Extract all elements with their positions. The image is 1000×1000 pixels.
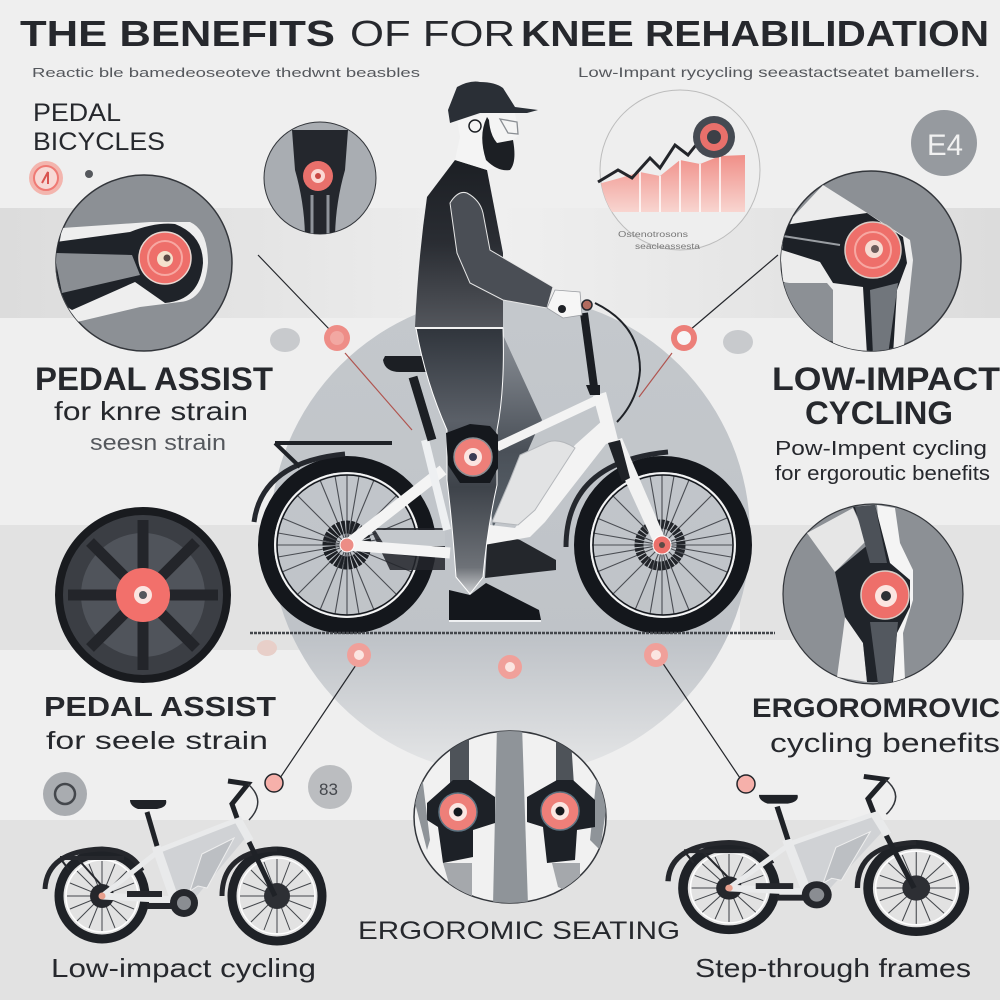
seat [383, 356, 427, 372]
label: low-impact cycling [772, 361, 1000, 485]
near leg [416, 328, 503, 594]
hubs [340, 538, 354, 552]
title [20, 13, 989, 54]
icon: small pedal badge [29, 161, 93, 195]
label: pedal bicycles [33, 99, 165, 156]
callout lines from knee panels [258, 255, 778, 778]
panel: recovery chart [598, 90, 760, 251]
fenders [254, 454, 345, 522]
label: pedal assist seale strain: PEDAL ASSIST [44, 691, 276, 722]
shoe [449, 583, 541, 620]
ground line [250, 632, 775, 634]
icon: small gray badges [43, 765, 352, 816]
icon: small gray badges: 83 [319, 780, 338, 799]
panel: recovery chart: Ostenotrosons [618, 230, 688, 239]
cap [448, 82, 538, 123]
beard [482, 117, 514, 170]
label: pedal bicycles: BICYCLES [33, 128, 165, 156]
frame [347, 470, 443, 545]
panel: knee close-up right [780, 171, 961, 355]
panel: knee joint right [783, 504, 963, 684]
label: low-impact cycling: CYCLING [805, 395, 953, 431]
panel: pedal joint close-up [50, 175, 232, 351]
label: ergonomic cycling benefits [752, 693, 1000, 758]
label: low-impact cycling: for ergoroutic benefits [775, 463, 990, 485]
label: pedal bicycles: PEDAL [33, 99, 121, 127]
chain guard [370, 528, 445, 570]
arm [450, 192, 553, 308]
subtitle right: Low-Impant rycycling seeastactseatet bamellers. [578, 64, 980, 80]
handlebar and stem [584, 313, 594, 387]
rear wheel [266, 464, 428, 626]
label: ergonomic cycling benefits: cycling benefits [770, 728, 1000, 758]
label: low-impact cycling bottom: Low-impact cycling [51, 953, 316, 983]
label: ergonomic seating: ERGOROMIC SEATING [358, 917, 680, 945]
icon: E4 badge [911, 110, 977, 176]
icon: E4 badge: E4 [927, 129, 963, 162]
main bicycle [254, 303, 744, 626]
central backdrop disc [270, 295, 750, 775]
label: low-impact cycling: LOW-IMPACT [772, 361, 1000, 397]
panel: recovery chart: seacleassesta [635, 242, 701, 251]
small bicycle left [45, 781, 322, 941]
ear [469, 120, 481, 132]
markers on callouts [265, 325, 755, 793]
front wheel [582, 464, 744, 626]
label: pedal assist knee strain: seesn strain [90, 430, 226, 455]
label: pedal assist seale strain [44, 691, 276, 755]
neck and face [455, 113, 519, 170]
eye marks [257, 328, 753, 656]
label: ergonomic cycling benefits: ERGOROMROVIC [752, 693, 1000, 723]
panel: twin knee close-up [414, 725, 607, 905]
label: pedal assist seale strain: for seele strain [46, 727, 268, 755]
subtitle left: Reactic ble bamedeoseoteve thedwnt beasbles [32, 65, 421, 80]
label: pedal assist knee strain: PEDAL ASSIST [35, 361, 273, 397]
label: step-through frames: Step-through frames [695, 953, 971, 983]
panel: wheel close-up [59, 511, 227, 679]
hand [547, 290, 582, 318]
panel: upper knee detail [264, 122, 376, 240]
small bicycle right [668, 776, 964, 932]
torso [415, 160, 503, 327]
knee brace [446, 424, 498, 483]
person: far leg [480, 335, 556, 578]
person [415, 82, 592, 621]
rear rack [275, 443, 392, 467]
title: OF FOR [350, 13, 515, 54]
title: KNEE REHABILIDATION [521, 13, 989, 54]
label: pedal assist knee strain [35, 361, 273, 455]
label: low-impact cycling: Pow-Impent cycling [775, 438, 987, 460]
title: THE BENEFITS [20, 13, 335, 54]
glasses [500, 119, 518, 134]
label: pedal assist knee strain: for knre strain [54, 396, 248, 426]
